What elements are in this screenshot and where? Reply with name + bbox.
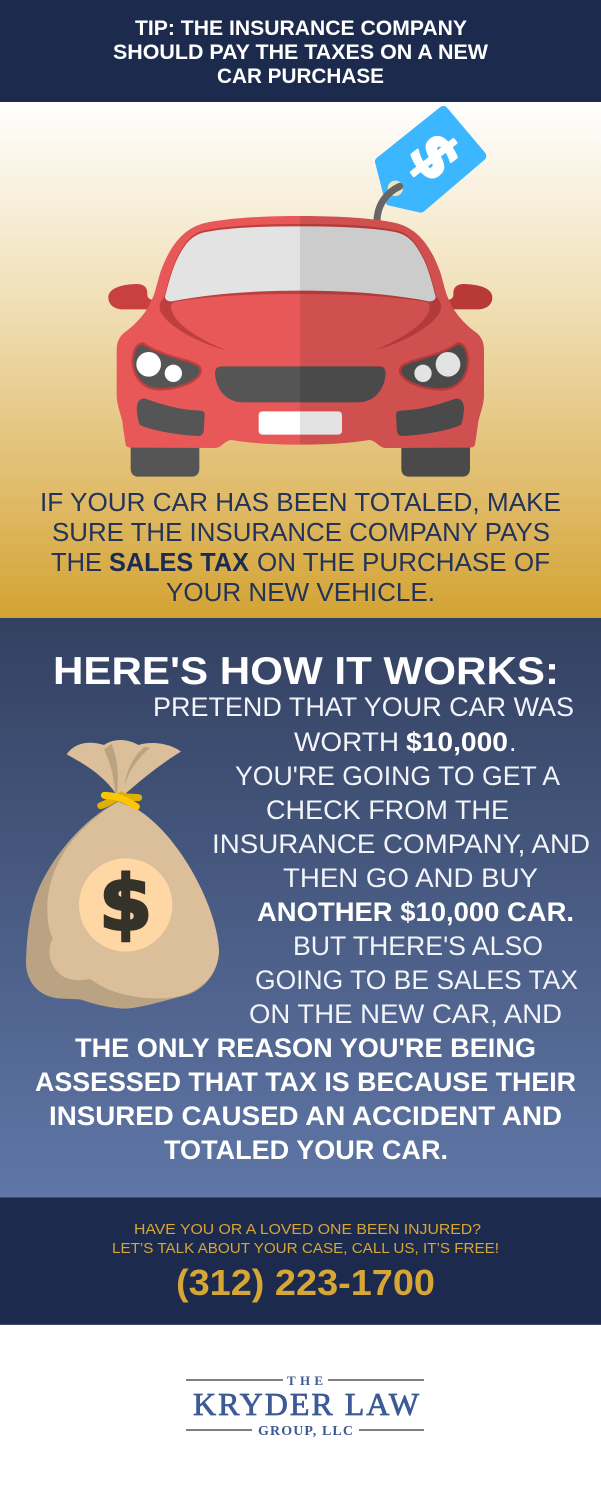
logo: The Kryder Law Group: GROUP, LLC	[258, 1424, 353, 1439]
heading: here's how it works: HERE'S HOW IT WORKS:	[53, 650, 559, 693]
panel: car and sales tax	[0, 102, 601, 618]
icon: blue price tag: $	[396, 119, 475, 194]
panel: how it works	[0, 618, 601, 1197]
logo: The Kryder Law Group: THE	[287, 1373, 323, 1388]
text block: pretend example: WORTH	[294, 727, 399, 757]
heading: tip title: SHOULD PAY THE TAXES ON A NEW	[113, 41, 488, 64]
text block: pretend example: THEN GO AND BUY	[283, 863, 538, 893]
text block: pretend example: ANOTHER $10,000 CAR.	[257, 897, 574, 927]
text block: pretend example: INSURANCE COMPANY, AND	[212, 829, 590, 859]
icon: blue price tag	[377, 111, 481, 221]
logo: The Kryder Law Group: KRYDER LAW	[193, 1386, 420, 1422]
heading: tip title: TIP: THE INSURANCE COMPANY	[135, 17, 467, 40]
text block: bold conclusion: INSURED CAUSED AN ACCIDENT AND	[49, 1101, 562, 1131]
text block: pretend example: GOING TO BE SALES TAX	[255, 965, 578, 995]
text block: sales tax advice: SURE THE INSURANCE COMPANY PAYS	[52, 517, 550, 547]
text block: pretend example: YOU'RE GOING TO GET A	[235, 761, 560, 791]
text block: pretend example: ON THE NEW CAR, AND	[249, 999, 562, 1029]
panel: header tip	[0, 0, 601, 102]
text block: sales tax advice: THE	[51, 547, 102, 577]
text block: sales tax advice: SALES TAX	[109, 547, 250, 577]
text block: pretend example: BUT THERE'S ALSO	[293, 931, 543, 961]
text block: pretend example	[153, 692, 590, 1029]
icon: red car with price tag	[108, 111, 492, 477]
text block: sales tax advice	[40, 487, 561, 607]
heading: tip title	[113, 17, 488, 88]
text block: call invitation: HAVE YOU OR A LOVED ONE BEEN INJURED?	[134, 1221, 481, 1238]
logo: The Kryder Law Group	[186, 1373, 424, 1439]
panel: call to action	[0, 1197, 601, 1325]
text block: call invitation: LET’S TALK ABOUT YOUR CASE, CALL US, IT’S FREE!	[112, 1240, 499, 1257]
text block: bold conclusion: TOTALED YOUR CAR.	[164, 1135, 448, 1165]
text block: pretend example: CHECK FROM THE	[266, 795, 509, 825]
text block: sales tax advice: IF YOUR CAR HAS BEEN TOTALED, MAKE	[40, 487, 561, 517]
text block: pretend example: PRETEND THAT YOUR CAR WAS	[153, 692, 574, 722]
phone number: (312) 223-1700	[176, 1262, 435, 1303]
text block: pretend example: .	[509, 727, 517, 757]
text block: call invitation	[112, 1221, 499, 1257]
icon: money bag	[26, 740, 219, 1009]
heading: tip title: CAR PURCHASE	[217, 65, 384, 88]
text block: bold conclusion: THE ONLY REASON YOU'RE BEING	[75, 1033, 536, 1063]
text block: sales tax advice: YOUR NEW VEHICLE.	[166, 577, 435, 607]
left half of car	[108, 216, 300, 477]
text block: bold conclusion: ASSESSED THAT TAX IS BECAUSE THEIR	[35, 1067, 576, 1097]
text block: pretend example: $10,000	[406, 727, 508, 757]
text block: bold conclusion	[35, 1033, 576, 1165]
text block: sales tax advice: ON THE PURCHASE OF	[257, 547, 550, 577]
right half of car	[300, 216, 492, 477]
icon: money bag: $	[99, 859, 152, 948]
